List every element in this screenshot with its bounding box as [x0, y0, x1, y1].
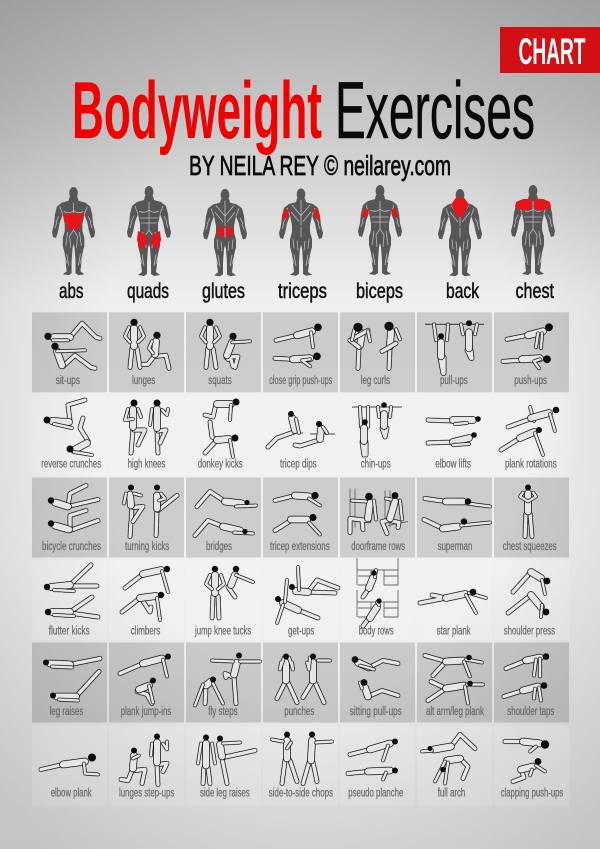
panel: tricep extensions	[263, 478, 338, 558]
muscle: abs	[52, 187, 95, 303]
panel: donkey kicks	[186, 395, 261, 475]
panel: lunges step-ups: lunges step-ups	[119, 787, 174, 799]
panel: shoulder press	[494, 560, 569, 640]
panel: bridges	[186, 478, 261, 558]
panel: pseudo planche: pseudo planche	[348, 787, 403, 799]
panel: tricep extensions: tricep extensions	[270, 541, 330, 553]
muscle: triceps: triceps	[278, 280, 327, 303]
muscle: quads	[127, 186, 171, 303]
muscle: glutes	[202, 189, 247, 303]
panel: superman	[417, 478, 492, 558]
muscle: quads: quads	[127, 280, 169, 303]
panel: leg raises: leg raises	[50, 706, 83, 718]
panel: reverse crunches	[32, 395, 107, 475]
panel: sit-ups	[32, 312, 107, 392]
panel: elbow lifts	[417, 395, 492, 475]
panel: chest squeezes: chest squeezes	[503, 541, 557, 553]
panel: sit-ups: sit-ups	[56, 375, 80, 387]
panel: star plank	[417, 560, 492, 640]
panel: high knees: high knees	[128, 458, 166, 470]
panel: plank jump-ins	[109, 642, 184, 722]
panel: jump knee tucks	[186, 560, 261, 640]
panel: tricep dips	[263, 395, 338, 475]
panel: leg curls: leg curls	[361, 375, 390, 387]
panel: shoulder taps: shoulder taps	[507, 706, 554, 718]
muscle: biceps: biceps	[356, 280, 403, 303]
muscle: chest: chest	[516, 280, 554, 303]
panel: punches: punches	[284, 706, 314, 718]
panel: elbow plank: elbow plank	[51, 787, 92, 799]
panel: pseudo planche	[340, 726, 415, 806]
panel: shoulder press: shoulder press	[504, 625, 555, 637]
panel: elbow plank	[32, 726, 107, 806]
panel: superman: superman	[438, 541, 472, 553]
panel: punches	[263, 642, 338, 722]
panel: star plank: star plank	[437, 625, 471, 637]
panel: plank jump-ins: plank jump-ins	[121, 706, 171, 718]
panel: climbers: climbers	[131, 625, 161, 637]
panel: sitting pull-ups: sitting pull-ups	[350, 706, 402, 718]
panel: pull-ups	[417, 312, 492, 392]
panel: sitting pull-ups	[340, 642, 415, 722]
panel: fly steps	[186, 642, 261, 722]
panel: flutter kicks: flutter kicks	[49, 625, 90, 637]
panel: chest squeezes	[494, 478, 569, 558]
panel: get-ups	[263, 560, 338, 640]
panel: shoulder taps	[494, 642, 569, 722]
panel: bridges: bridges	[206, 541, 232, 553]
title: Bodyweight	[72, 66, 322, 156]
panel: squats	[186, 312, 261, 392]
panel: plank rotations: plank rotations	[505, 458, 557, 470]
panel: high knees	[109, 395, 184, 475]
panel: push-ups	[494, 312, 569, 392]
panel: chin-ups	[340, 395, 415, 475]
panel: tricep dips: tricep dips	[280, 458, 317, 470]
muscle: chest	[511, 185, 555, 303]
panel: body rows: body rows	[359, 625, 394, 637]
panel: bicycle crunches	[32, 478, 107, 558]
muscle: biceps	[356, 185, 403, 303]
panel: full arch	[417, 726, 492, 806]
panel: chin-ups: chin-ups	[361, 458, 391, 470]
panel: close grip push-ups: close grip push-ups	[269, 375, 332, 387]
panel: doorframe rows: doorframe rows	[351, 541, 405, 553]
panel: donkey kicks: donkey kicks	[198, 458, 243, 470]
muscle: abs: abs	[59, 280, 84, 303]
muscle: back: back	[446, 280, 479, 303]
panel: full arch: full arch	[438, 787, 465, 799]
panel: lunges step-ups	[109, 726, 184, 806]
panel: turning kicks	[109, 478, 184, 558]
panel: side leg raises: side leg raises	[200, 787, 250, 799]
panel: plank rotations	[494, 395, 569, 475]
panel: lunges	[109, 312, 184, 392]
byline: BY NEILA REY © neilarey.com	[189, 150, 451, 181]
muscle: glutes: glutes	[202, 280, 245, 303]
panel: flutter kicks	[32, 560, 107, 640]
panel: turning kicks: turning kicks	[125, 541, 169, 553]
panel: squats: squats	[208, 375, 232, 387]
panel: side-to-side chops: side-to-side chops	[269, 787, 333, 799]
panel: climbers	[109, 560, 184, 640]
panel: alt arm/leg plank: alt arm/leg plank	[426, 706, 484, 718]
panel: alt arm/leg plank	[417, 642, 492, 722]
panel: body rows	[340, 558, 415, 640]
panel: side leg raises	[186, 726, 261, 806]
panel: fly steps: fly steps	[208, 706, 238, 718]
panel: bicycle crunches: bicycle crunches	[42, 541, 101, 553]
panel: side-to-side chops	[263, 726, 338, 806]
panel: clapping push-ups	[494, 726, 569, 806]
panel: elbow lifts: elbow lifts	[435, 458, 471, 470]
panel: get-ups: get-ups	[288, 625, 314, 637]
panel: leg raises	[32, 642, 107, 722]
panel: jump knee tucks: jump knee tucks	[194, 625, 251, 637]
panel: close grip push-ups	[263, 312, 338, 392]
panel: clapping push-ups: clapping push-ups	[501, 787, 563, 799]
panel: leg curls	[340, 312, 415, 392]
muscle: back	[438, 189, 482, 303]
panel: reverse crunches: reverse crunches	[41, 458, 101, 470]
muscle: triceps	[278, 188, 327, 303]
panel: doorframe rows	[340, 478, 415, 558]
panel: lunges: lunges	[132, 375, 155, 387]
panel: pull-ups: pull-ups	[440, 375, 468, 387]
panel: push-ups: push-ups	[514, 375, 547, 387]
